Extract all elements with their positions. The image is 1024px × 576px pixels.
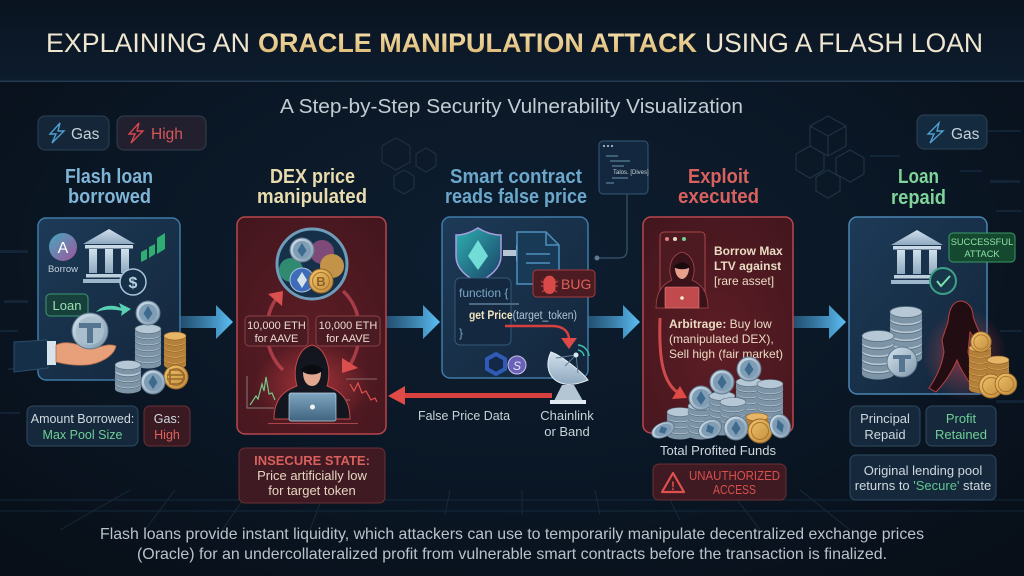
- coins: profited funds: [649, 357, 794, 443]
- icon: bug badge: [533, 270, 595, 297]
- icon: dollar coin: $: [129, 275, 138, 292]
- callout: unauthorized access: UNAUTHORIZED: [689, 468, 780, 483]
- icon: dollar coin: [120, 269, 146, 295]
- title: [46, 28, 983, 58]
- callout: successful attack: SUCCESSFUL: [951, 237, 1013, 247]
- callout: swap right: for AAVE: [326, 333, 370, 345]
- heading: exploit executed: Exploit: [688, 166, 749, 188]
- callout: profit retained: Profit: [946, 411, 977, 426]
- icon: bank: [83, 229, 135, 283]
- arrow: shield to document: [503, 245, 526, 261]
- callout: principal repaid: Repaid: [864, 427, 906, 442]
- arrow: step 1 to 2: [180, 305, 233, 339]
- icon: aave logo: A: [58, 240, 69, 257]
- label: loan chip: Loan: [53, 298, 81, 313]
- arrow: step 2 to 3: [386, 305, 440, 339]
- hacker glow: [254, 343, 370, 427]
- arrow: red data path: [505, 326, 577, 349]
- heading: flash loan borrowed: borrowed: [68, 186, 151, 208]
- footer description: (Oracle) for an undercollateralized profit from vulnerable smart contracts before the transaction is finalized.: [137, 546, 887, 563]
- callout: lending pool secure: returns to 'Secure' state: [855, 478, 991, 493]
- chart: red price: [346, 379, 377, 402]
- callout: insecure state: for target token: [268, 483, 356, 498]
- text: arbitrage: (manipulated DEX),: [669, 332, 774, 346]
- callout: swap right: [316, 316, 380, 346]
- label: loan chip: [46, 294, 88, 316]
- icon: band circle: S: [513, 359, 521, 373]
- decorative hex network right: [796, 116, 864, 198]
- chip: gas right: Gas: [951, 126, 980, 143]
- arrow: red curve to funds: [660, 318, 687, 399]
- icon: hacker: [268, 345, 358, 424]
- icon: attacker walking away: [923, 301, 1007, 401]
- text: borrow max: LTV against: [714, 259, 781, 273]
- decorative hex network left: [382, 138, 436, 194]
- callout: amount borrowed: Max Pool Size: [43, 428, 122, 442]
- text: arbitrage: Arbitrage:: [669, 317, 726, 331]
- icon: lightning: [50, 123, 64, 143]
- heading: dex price manipulated: DEX price: [270, 166, 355, 188]
- text: arbitrage: Sell high (fair market): [669, 347, 783, 361]
- icon: document: [517, 232, 559, 284]
- text: borrow max: [rare asset]: [714, 274, 774, 288]
- icon: lightning right: [928, 123, 943, 143]
- footer description: Flash loans provide instant liquidity, which attackers can use to temporarily manipulate decentralized exchange prices: [100, 526, 924, 543]
- icon: satellite dish: [548, 345, 589, 404]
- callout: lending pool secure: Original lending pool: [864, 463, 982, 478]
- panel: flash loan borrowed: [14, 218, 188, 394]
- chip: gas left: [38, 116, 109, 150]
- icon: band circle: [508, 356, 526, 374]
- callout: principal repaid: [850, 406, 920, 446]
- callout: swap left: [245, 316, 308, 346]
- callout: amount borrowed: [27, 406, 138, 446]
- text: arbitrage: Buy low: [726, 317, 772, 331]
- heading: flash loan borrowed: Flash loan: [65, 166, 153, 188]
- coins: gold stack: [164, 332, 188, 389]
- heading: dex price manipulated: manipulated: [257, 186, 367, 208]
- hacker window: [656, 232, 708, 308]
- chip: high left: High: [151, 126, 183, 143]
- icon: token pool: B: [316, 274, 326, 289]
- arrow: cycle right: [342, 291, 359, 373]
- arrow: teal curve: [96, 303, 131, 316]
- panel: dex price manipulated: [237, 217, 386, 434]
- label: chainlink or band: Chainlink: [540, 408, 594, 423]
- code: function: function {: [459, 286, 508, 300]
- callout: swap left: for AAVE: [255, 333, 298, 345]
- chip: gas right: [917, 115, 987, 149]
- label: borrow: Borrow: [48, 264, 78, 275]
- callout: unauthorized access: ACCESS: [713, 482, 756, 497]
- icon: tether coin repaid: [887, 347, 917, 377]
- coins: small silver stack: [115, 360, 165, 394]
- title: ORACLE MANIPULATION ATTACK: [258, 28, 697, 58]
- icon: token pool: [277, 229, 347, 299]
- subtitle: A Step-by-Step Security Vulnerability Visualization: [280, 96, 743, 118]
- callout: insecure state: [239, 448, 385, 503]
- label: total profited funds: Total Profited Funds: [660, 443, 776, 458]
- icon: tether coin: [72, 313, 108, 349]
- callout: insecure state: Price artificially low: [257, 468, 368, 483]
- icon: check circle: [930, 268, 956, 294]
- icon: hacker small: [656, 252, 708, 308]
- coins: profit gold: [969, 332, 1017, 398]
- icon: red laptop: [665, 287, 699, 308]
- chart: green price: [247, 376, 275, 408]
- icon: shield: [456, 228, 501, 282]
- callout: gas high: [144, 406, 190, 446]
- callout: principal repaid: Principal: [860, 411, 910, 426]
- icon: hand with sleeve: [14, 340, 116, 372]
- code: false text: Talos. [Dives]: [613, 170, 649, 176]
- panel: code window: [594, 141, 649, 260]
- callout: swap left: 10,000 ETH: [247, 320, 306, 332]
- arrow: false price data: [388, 386, 552, 405]
- icon: red lightning: [129, 123, 143, 143]
- coins: silver stack: [135, 301, 161, 368]
- callout: gas high: High: [154, 428, 180, 442]
- arrow: cycle left: [267, 291, 283, 370]
- panel: smart contract: [442, 217, 595, 378]
- arrow: step 4 to 5: [793, 305, 846, 339]
- code block: [455, 278, 577, 345]
- icon: compound logo: [141, 233, 165, 262]
- heading: smart contract reads false price: Smart contract: [450, 166, 582, 188]
- callout: swap right: 10,000 ETH: [319, 320, 377, 332]
- icon: chainlink hexagon: [487, 354, 505, 374]
- callout: profit retained: Retained: [935, 427, 987, 442]
- callout: amount borrowed: Amount Borrowed:: [31, 412, 134, 426]
- icon: bank repaid: [891, 230, 943, 284]
- panel: loan repaid: [849, 217, 1017, 401]
- code: get price: get Price(target_token): [469, 310, 577, 322]
- heading: loan repaid: Loan: [898, 166, 939, 188]
- heading: loan repaid: repaid: [891, 187, 946, 209]
- label: false price data: False Price Data: [418, 409, 510, 423]
- label: chainlink or band: or Band: [544, 424, 590, 439]
- icon: aave logo: [49, 233, 77, 261]
- icon: warning triangle: !: [671, 479, 675, 493]
- text: borrow max: Borrow Max: [714, 244, 783, 258]
- chip: gas left: Gas: [71, 126, 100, 143]
- arrow: step 3 to 4: [588, 305, 640, 339]
- icon: bug badge: BUG: [561, 276, 591, 292]
- heading: exploit executed: executed: [678, 186, 759, 208]
- code: close brace: }: [459, 326, 463, 340]
- coins: principal stacks: [862, 306, 922, 380]
- callout: insecure state: INSECURE STATE:: [254, 453, 370, 468]
- heading: smart contract reads false price: reads false price: [445, 186, 587, 208]
- callout: unauthorized access: [653, 464, 786, 500]
- title: USING A FLASH LOAN: [705, 28, 983, 58]
- title: EXPLAINING AN: [46, 28, 250, 58]
- callout: gas high: Gas:: [154, 412, 180, 426]
- callout: successful attack: ATTACK: [964, 249, 1000, 259]
- callout: lending pool secure: [850, 455, 996, 500]
- callout: successful attack: [949, 233, 1015, 262]
- callout: profit retained: [926, 406, 996, 446]
- chip: high left: [117, 116, 206, 150]
- panel: exploit executed: [643, 217, 794, 443]
